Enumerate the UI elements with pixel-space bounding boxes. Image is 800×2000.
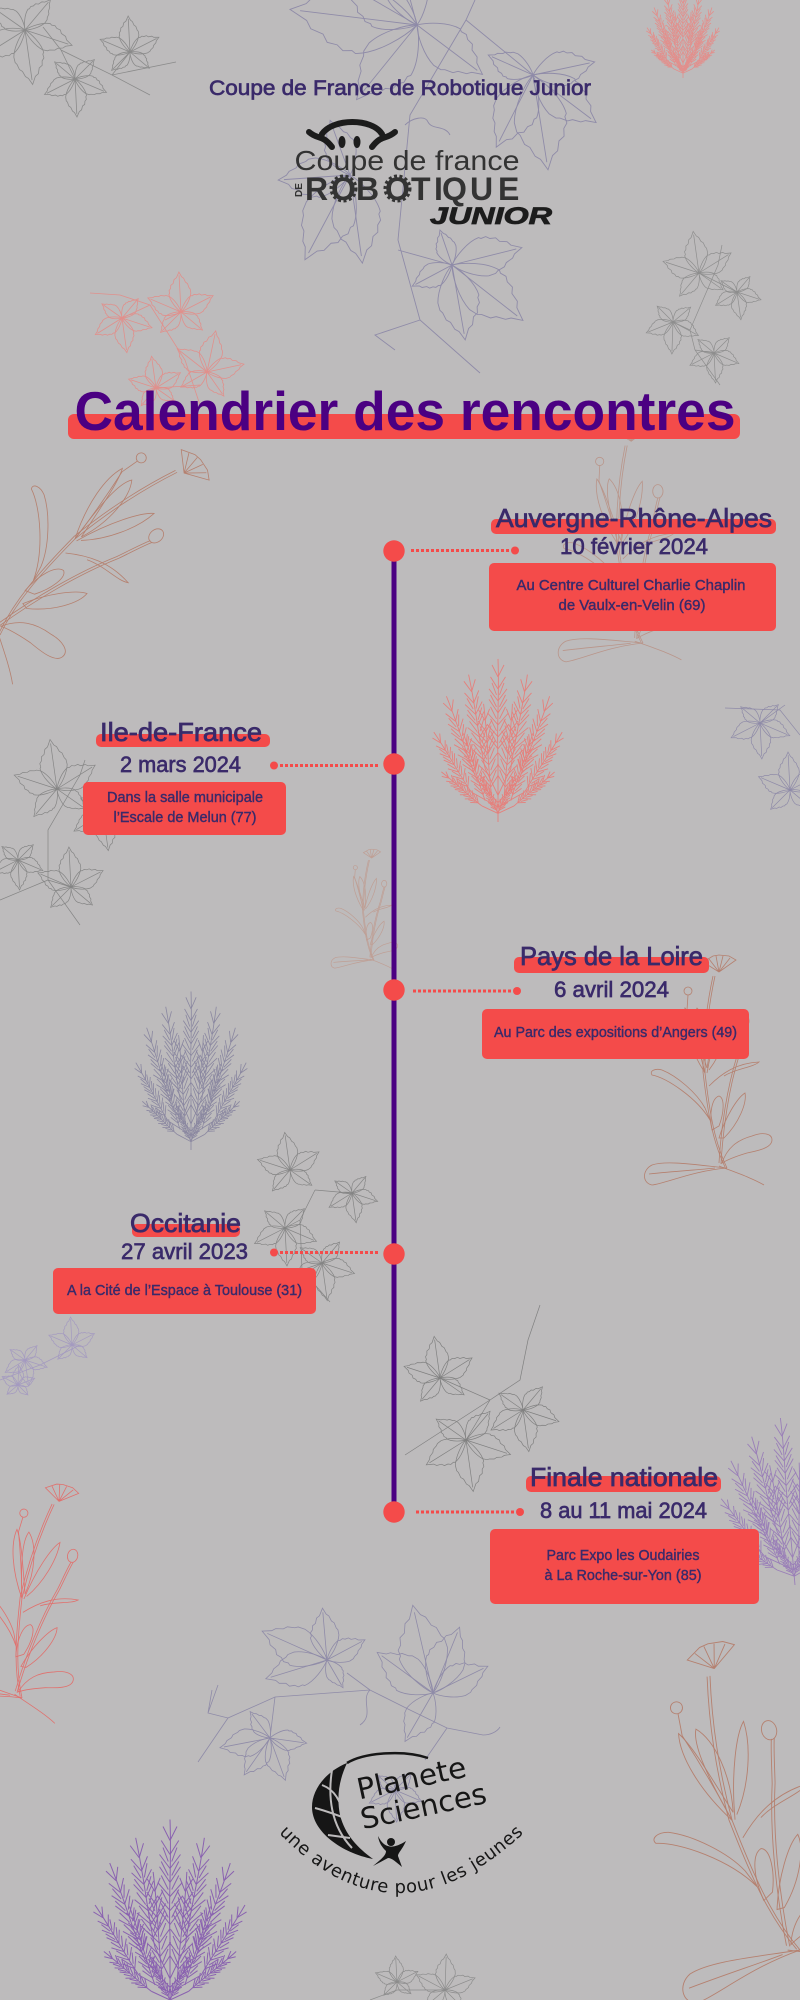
decorative flower: right: [644, 955, 772, 1185]
location text: [107, 790, 263, 826]
logo line: Coupe de france: Coupe de france: [294, 145, 520, 176]
event: Auvergne-Rhône-Alpes: [411, 503, 776, 631]
decorative vine: right edge: [725, 698, 800, 817]
location text: Parc Expo les Oudairies: [546, 1548, 700, 1564]
location text: A la Cité de l’Espace à Toulouse (31): [67, 1283, 302, 1299]
decorative vine: top left: [0, 0, 176, 120]
icon: gears on the O letters: [331, 176, 410, 201]
event: Pays de la Loire: [413, 941, 749, 1059]
event: Finale nationale: [416, 1462, 759, 1604]
icon: globe crescent: [312, 1753, 428, 1859]
logo text: Planete: Planete: [354, 1750, 469, 1806]
decorative flower: left red: [0, 1467, 116, 1725]
decorative vine: red left: [86, 269, 253, 413]
decorative rosemary: right purple: [708, 1412, 800, 1591]
location text: l’Escale de Melun (77): [114, 810, 256, 826]
location text: Dans la salle municipale: [107, 790, 263, 806]
decorative rosemary: top right: [643, 0, 723, 78]
connector: [411, 546, 519, 554]
location text: de Vaulx-en-Velin (69): [558, 598, 706, 614]
decorative rosemary: grey: [130, 992, 252, 1150]
timeline nodes: [383, 540, 405, 1523]
decorative vine: small purple: [0, 1315, 99, 1398]
event: Occitanie: [53, 1208, 378, 1314]
connector: [416, 1508, 524, 1516]
title text: Calendrier des rencontres: [74, 380, 736, 442]
logo line: JUNIOR: JUNIOR: [430, 203, 553, 230]
heading highlight: [491, 519, 776, 534]
logo tagline: une aventure pour les jeunes: [281, 1827, 522, 1897]
heading: Ile-de-France: [100, 717, 262, 747]
decorative vine: top centre: [277, 0, 609, 373]
decorative vine: left: [0, 731, 144, 925]
connector: [270, 762, 379, 770]
logo: Planète Sciences: [281, 1750, 522, 1897]
connector: [413, 987, 521, 995]
decorative rosemary: middle salmon: [427, 659, 569, 822]
decorative vine: Occitanie: [248, 1126, 384, 1307]
heading: Occitanie: [130, 1208, 241, 1238]
location box: [490, 1529, 759, 1604]
heading highlight: [526, 1476, 721, 1492]
heading highlight: [514, 957, 709, 973]
decorative vine: lower centre: [395, 1305, 568, 1500]
heading: Auvergne-Rhône-Alpes: [496, 503, 772, 533]
decorative vine: bottom centre: [370, 1954, 478, 2000]
decorative flower: bottom right: [600, 1624, 800, 2000]
location text: à La Roche-sur-Yon (85): [544, 1568, 702, 1584]
title highlight: [68, 414, 740, 439]
heading highlight: [132, 1224, 240, 1237]
decorative vine: right: [643, 225, 767, 386]
timeline line: [392, 551, 396, 1512]
location box: [489, 563, 776, 631]
logo text: Sciences: Sciences: [357, 1776, 490, 1836]
header text: Coupe de France de Robotique Junior: [209, 77, 591, 100]
location text: [516, 578, 746, 614]
date: 10 février 2024: [560, 534, 708, 559]
title: [68, 380, 740, 442]
decorative flower: middle small: [331, 849, 399, 969]
icon: robot head with horns: [309, 122, 395, 147]
date: 27 avril 2023: [121, 1239, 248, 1264]
decorative flower: left: [0, 387, 242, 692]
heading: Finale nationale: [530, 1462, 718, 1492]
location text: Au Parc des expositions d’Angers (49): [494, 1025, 737, 1041]
connector: [270, 1248, 378, 1256]
decorative flower: centre right: [554, 423, 690, 662]
date: 8 au 11 mai 2024: [540, 1498, 707, 1523]
decorative rosemary: bottom purple: [88, 1820, 252, 2000]
date: 6 avril 2024: [554, 977, 669, 1002]
event: Ile-de-France: [83, 717, 379, 835]
date: 2 mars 2024: [120, 752, 241, 777]
location text: Au Centre Culturel Charlie Chaplin: [516, 578, 746, 594]
logo line: de: DE: [294, 183, 305, 197]
logo line: ROBOTIQUE: ROBOTIQUE: [305, 171, 519, 207]
location box: [482, 1009, 749, 1059]
location box: [83, 782, 286, 835]
icon: figure: [373, 1836, 406, 1867]
logo: Coupe de France de Robotique Junior: [294, 122, 553, 230]
decorative vine: bottom: [198, 1600, 500, 1825]
location box: [53, 1268, 316, 1314]
heading: Pays de la Loire: [520, 941, 703, 971]
heading highlight: [96, 734, 270, 747]
location text: [544, 1548, 702, 1584]
